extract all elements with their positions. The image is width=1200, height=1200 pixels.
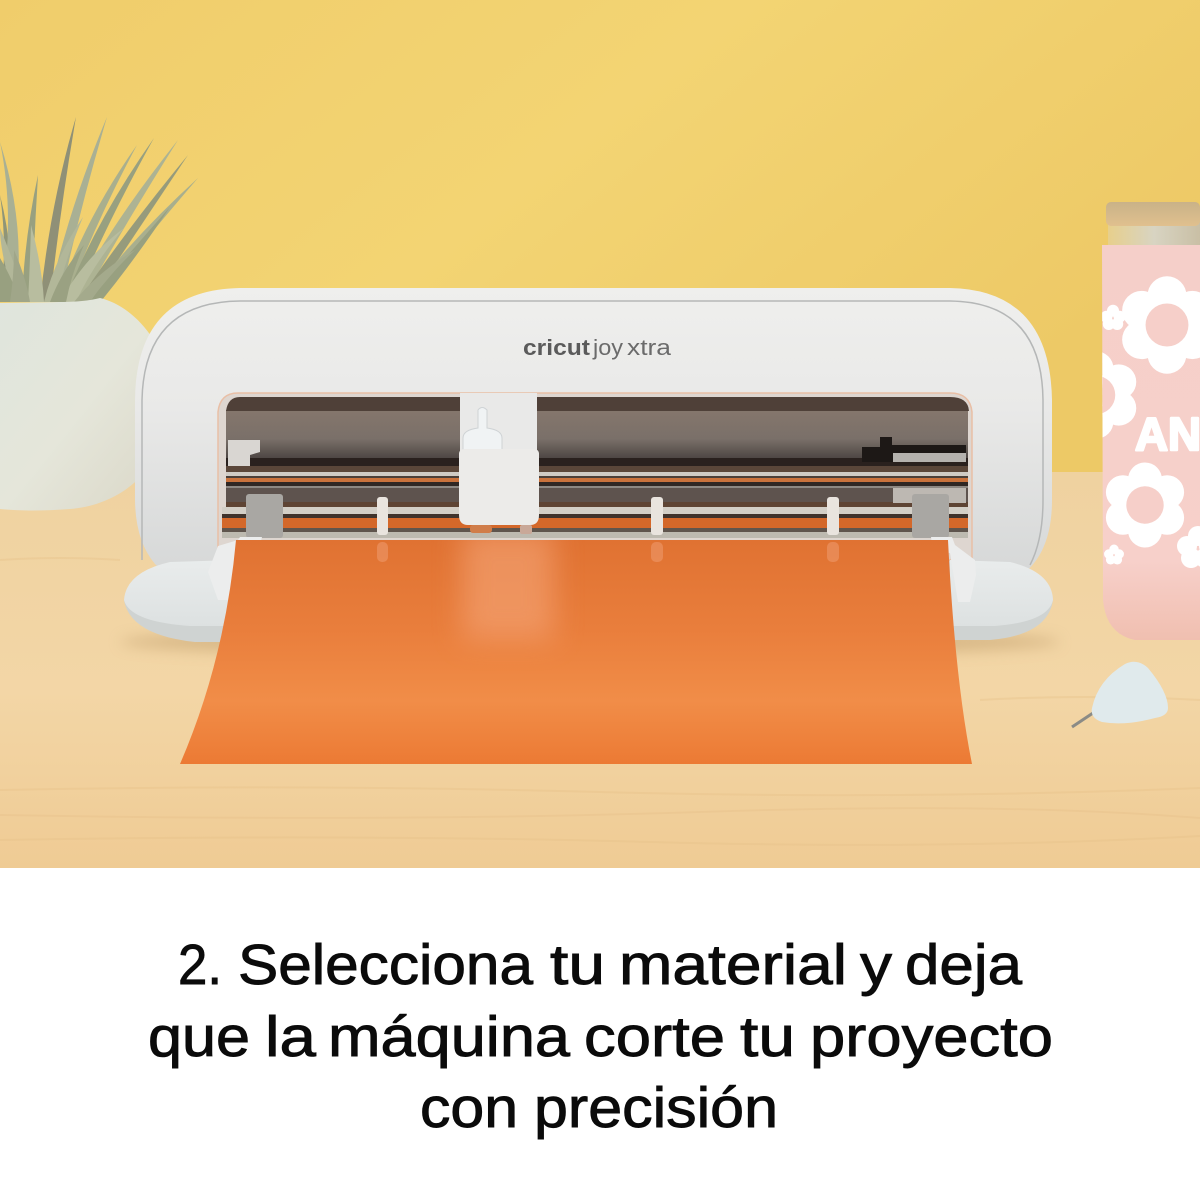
pink glass jar [1102,202,1200,640]
right edge flower [1177,526,1200,568]
shell seam line [142,301,1043,565]
upper interior dark band [226,397,969,411]
caption line 3: con [420,1076,518,1140]
sheet highlight [462,530,554,640]
lower rod [222,532,968,538]
orange material behind roller [222,518,968,528]
jar decorations [1102,276,1200,568]
weeding tool [1072,662,1168,727]
back interior panel [226,410,968,458]
wheel reflections [377,542,839,562]
logo word cricut: cricut [523,335,591,360]
right bracket light strip [893,453,966,462]
left tray underside [124,600,235,642]
right interior bracket [862,437,966,462]
rear post [520,525,532,534]
roller shadow [222,514,968,518]
lower interior [226,488,968,504]
blade tip [470,525,492,533]
left interior bracket [228,440,260,466]
right pinch wheel holder [912,494,949,538]
plant leaves [0,117,198,302]
feed roller [222,507,968,514]
caption line 1: y [860,933,893,997]
photo background: wooden desk [0,472,1200,868]
photo background: yellow wall [0,0,1200,480]
left edge flower [1102,352,1136,438]
potted plant [0,117,198,510]
caption line 1: tu [550,933,605,997]
logo word xtra: xtra [627,335,672,360]
white caption panel [0,868,1200,1200]
caption line 1: deja [905,933,1022,997]
dark rail shadow [226,482,968,486]
caption line 2 [148,1005,1053,1069]
big top flower [1122,276,1200,374]
small flower top [1100,305,1126,330]
blade holder knob [463,408,502,451]
jar body [1102,245,1200,640]
tool needle [1072,711,1096,727]
caption line 1: 2. [178,933,222,997]
machine body [135,288,1052,590]
caption line 2: tu [740,1005,795,1069]
caption text [148,933,1053,1140]
orange material sheet [180,530,972,764]
machine opening [218,393,972,560]
caption line 1 [178,933,1022,997]
caption line 2: corte [584,1005,725,1069]
carriage rod [226,472,968,476]
cutting carriage [459,393,539,534]
logo word joy: joy [592,335,623,360]
carriage column [460,393,537,453]
right guide clip [931,537,976,602]
caption line 3: precisión [534,1076,778,1140]
left guide clip [208,537,262,600]
caption line 2: la [265,1005,316,1069]
cutting machine [124,288,1053,642]
machine shadow on desk [120,626,1060,658]
caption line 1: material [619,933,847,997]
caption line 2: proyecto [810,1005,1053,1069]
thin rail [226,486,968,488]
lower interior band [226,502,968,507]
sheet surface [180,540,972,764]
caption line 2: máquina [328,1005,570,1069]
caption line 1: Selecciona [238,933,533,997]
orange reflection strip [226,478,968,482]
small flower bottom [1104,545,1124,564]
tool handle [1092,662,1168,723]
right tray [950,560,1053,626]
caption line 2: que [148,1005,250,1069]
dark slot [222,528,968,532]
glass neck [1108,222,1200,248]
upper rail [226,458,968,466]
bamboo lid [1106,202,1200,226]
lower flower [1106,462,1184,548]
right tray underside [950,600,1053,640]
rail stack [226,466,968,472]
white vase [0,298,170,510]
jar lettering: AN [1135,408,1200,460]
star wheels [377,497,839,535]
left tray [124,560,235,626]
left pinch wheel holder [246,494,283,538]
rod gap [226,476,968,478]
carriage head [459,449,539,525]
logo [523,335,672,360]
caption line 3 [420,1076,778,1140]
right lower block [893,488,966,503]
